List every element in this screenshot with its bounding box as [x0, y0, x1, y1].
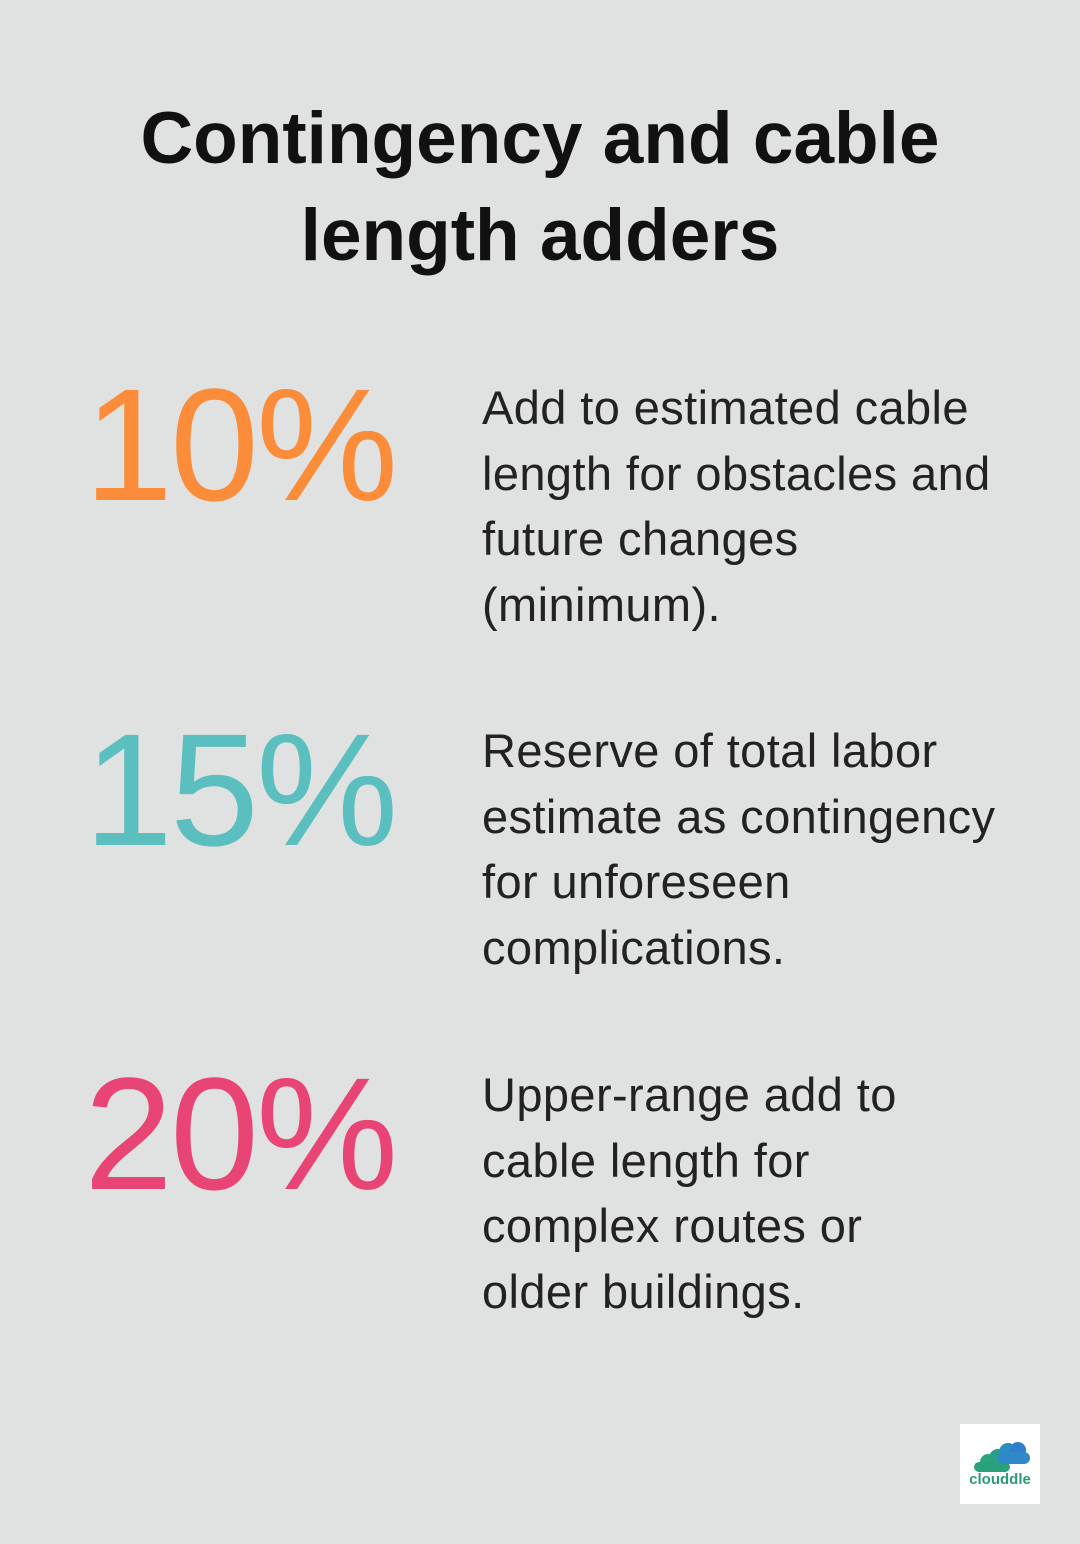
number 15%: 15% — [84, 700, 395, 879]
description 15%: estimate as contingency — [482, 790, 995, 842]
logo: clouddle — [960, 1424, 1040, 1504]
title — [140, 98, 940, 276]
description 20% — [482, 1068, 897, 1318]
title: length adders — [301, 195, 779, 276]
description 15%: for unforeseen — [482, 855, 791, 908]
description 10%: future changes — [482, 512, 799, 565]
number 10%: 10% — [84, 355, 395, 534]
stat: 15% — [84, 700, 995, 974]
description 15% — [482, 724, 995, 974]
description 20%: older buildings. — [482, 1264, 805, 1318]
description 20%: cable length for — [482, 1134, 810, 1186]
description 10% — [482, 381, 991, 631]
title: Contingency and cable — [140, 98, 940, 179]
description 10%: Add to estimated cable — [482, 381, 969, 434]
description 20%: complex routes or — [482, 1199, 862, 1252]
description 10%: (minimum). — [482, 578, 721, 630]
number 20%: 20% — [84, 1044, 395, 1223]
stat: 20% — [84, 1044, 897, 1318]
description 15%: complications. — [482, 920, 785, 974]
description 10%: length for obstacles and — [482, 446, 991, 500]
stat: 10% — [84, 355, 991, 631]
description 20%: Upper-range add to — [482, 1068, 897, 1121]
logo: clouddle: clouddle — [969, 1471, 1031, 1488]
description 15%: Reserve of total labor — [482, 724, 938, 777]
